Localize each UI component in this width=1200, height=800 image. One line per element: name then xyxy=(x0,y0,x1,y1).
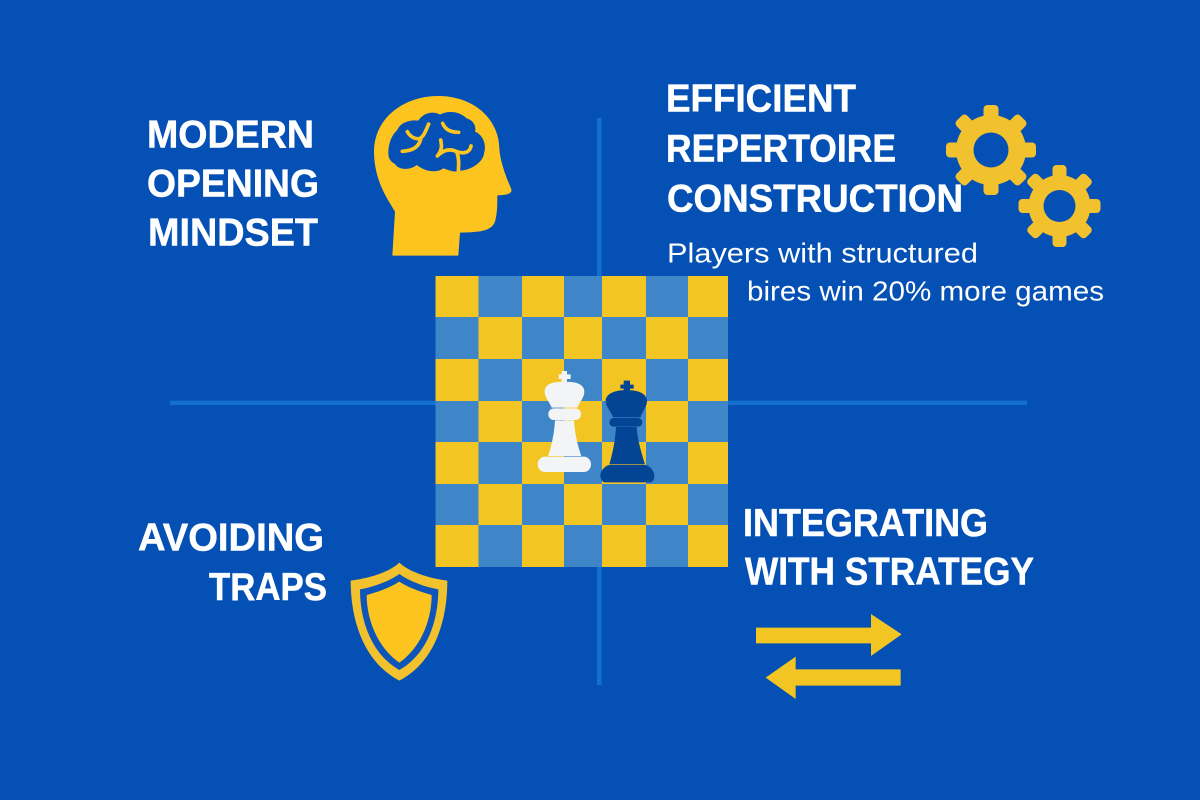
icon: large gear xyxy=(946,105,1036,195)
heading: integrating with strategy: INTEGRATING xyxy=(743,502,988,545)
chessboard xyxy=(436,276,728,567)
text: repertoire statistic xyxy=(667,238,1104,307)
heading: efficient repertoire construction: REPERTOIRE xyxy=(666,128,896,171)
heading: avoiding traps: TRAPS xyxy=(209,566,327,609)
panel: integrating with strategy xyxy=(743,502,1034,699)
icon: shield xyxy=(351,563,447,681)
heading: efficient repertoire construction: EFFICIENT xyxy=(666,78,856,121)
text: repertoire statistic: bires win 20% more games xyxy=(747,276,1104,307)
heading: modern opening mindset: MINDSET xyxy=(148,212,318,255)
heading: avoiding traps xyxy=(138,517,327,609)
text: repertoire statistic: Players with structured xyxy=(667,238,978,269)
heading: efficient repertoire construction xyxy=(666,78,963,221)
panel: avoiding traps xyxy=(138,517,447,681)
heading: avoiding traps: AVOIDING xyxy=(138,517,324,560)
heading: modern opening mindset: MODERN xyxy=(147,114,314,156)
heading: modern opening mindset: OPENING xyxy=(147,163,319,206)
heading: efficient repertoire construction: CONSTRUCTION xyxy=(667,178,963,221)
panel: efficient repertoire construction xyxy=(666,78,1104,307)
heading: modern opening mindset xyxy=(147,114,319,255)
panel: modern opening mindset xyxy=(147,96,511,256)
icon: left arrow xyxy=(766,657,901,699)
icon: small gear xyxy=(1018,165,1100,247)
white king xyxy=(538,371,591,472)
black king xyxy=(600,381,654,482)
icon: right arrow xyxy=(756,614,902,656)
icon: head with brain xyxy=(374,96,511,256)
heading: integrating with strategy: WITH STRATEGY xyxy=(745,550,1034,593)
heading: integrating with strategy xyxy=(743,502,1034,593)
